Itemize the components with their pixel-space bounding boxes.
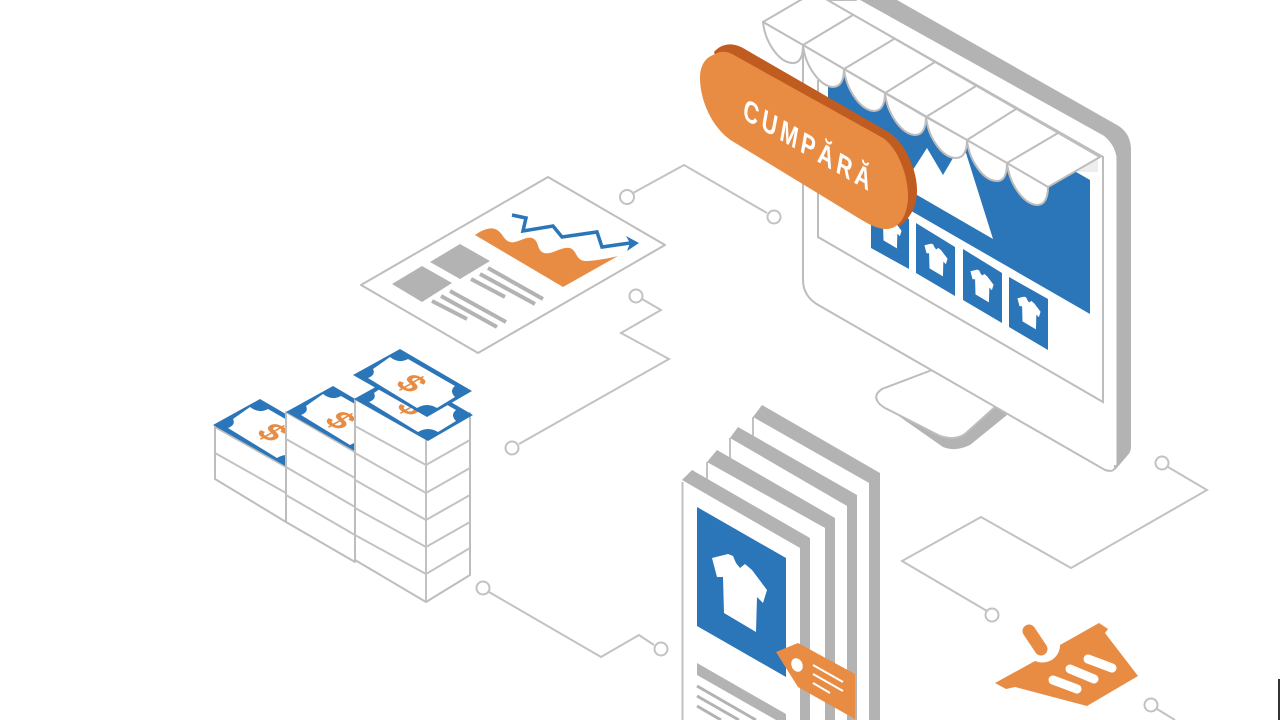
middle bill: $ xyxy=(315,406,365,435)
icon: product catalog pages xyxy=(682,405,880,720)
top right bill: $ xyxy=(386,369,436,398)
connector: basket exit xyxy=(1144,698,1175,720)
page 2 xyxy=(707,450,835,720)
connector: monitor to basket xyxy=(902,456,1207,622)
middle bill xyxy=(286,386,354,450)
connector: money to catalog xyxy=(476,582,668,657)
icon: shopping basket xyxy=(995,623,1138,706)
monitor stand xyxy=(876,370,1007,449)
report area chart xyxy=(475,228,618,287)
monitor screen outline xyxy=(818,0,1103,402)
monitor front xyxy=(803,0,1115,471)
thumbnail 4 xyxy=(1009,277,1048,350)
icon: desktop monitor storefront xyxy=(763,0,1131,471)
icon: money stacks xyxy=(213,349,473,602)
product image xyxy=(697,507,786,677)
right stack xyxy=(353,349,473,602)
page 3 xyxy=(730,427,857,720)
awning shadow xyxy=(1077,158,1098,172)
price tag xyxy=(776,643,855,719)
icon: report document with charts xyxy=(361,177,665,353)
page 1 xyxy=(682,470,810,720)
screen banner xyxy=(828,29,1090,314)
connector: report to monitor xyxy=(620,165,780,224)
thumbnail 1 xyxy=(871,197,909,269)
basket handle xyxy=(1029,631,1041,649)
button face xyxy=(700,52,908,229)
basket slots xyxy=(1053,659,1112,689)
connector: report to money xyxy=(506,290,669,454)
product thumbnails xyxy=(871,197,1048,350)
top right bill xyxy=(353,349,472,417)
product description xyxy=(697,663,786,720)
lower right bill: $ xyxy=(387,392,437,421)
button: CUMPĂRĂ xyxy=(700,44,917,229)
report image blocks xyxy=(392,244,490,302)
button side xyxy=(714,44,917,226)
page edge mark xyxy=(1278,679,1280,720)
lower right bill xyxy=(354,373,473,441)
middle stack xyxy=(285,386,356,563)
left bill: $ xyxy=(247,418,297,447)
page 4 xyxy=(753,405,880,720)
monitor side xyxy=(857,0,1131,470)
shop awning xyxy=(763,0,1100,205)
banner mountains xyxy=(900,148,993,239)
report trend arrow xyxy=(512,215,639,251)
button label: CUMPĂRĂ xyxy=(741,91,877,200)
report text lines xyxy=(432,268,543,327)
thumbnail 3 xyxy=(963,249,1002,323)
thumbnail 2 xyxy=(916,223,955,296)
left stack xyxy=(213,399,286,523)
